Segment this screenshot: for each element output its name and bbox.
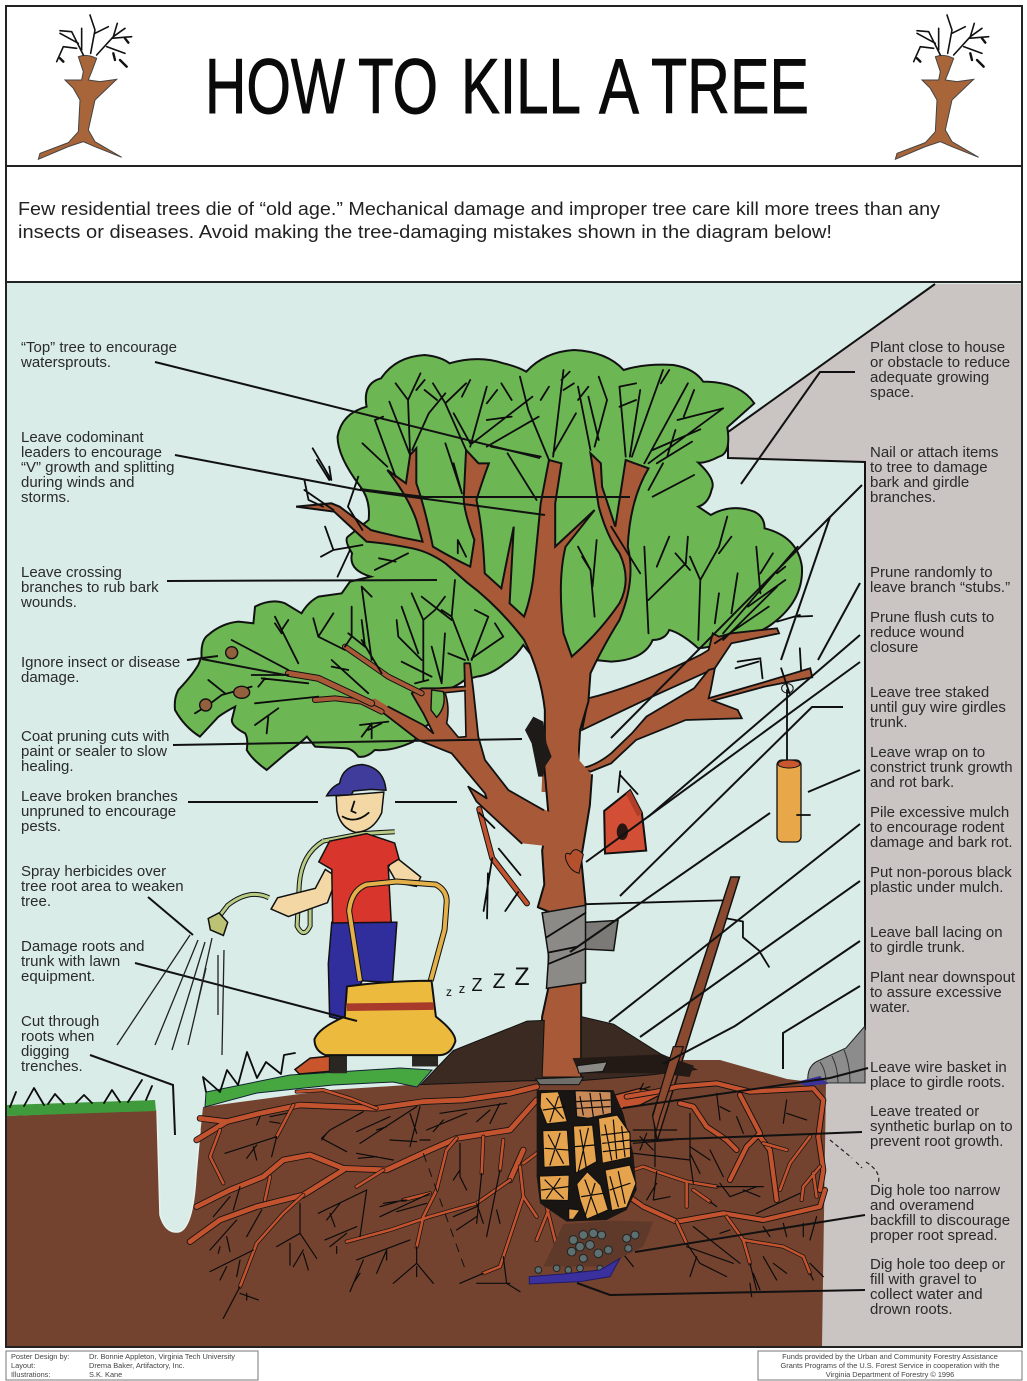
trench [157, 1110, 200, 1232]
label: herbicides: Spray herbicides over [21, 863, 166, 880]
label: burlap: synthetic burlap on to [870, 1118, 1013, 1135]
canopy twigs [304, 370, 798, 643]
right forks [582, 628, 779, 730]
hanging feeder [777, 690, 810, 842]
label: top tree: watersprouts. [20, 354, 111, 371]
label: plant close: adequate growing [870, 369, 989, 386]
label: insect damage: damage. [21, 669, 79, 686]
right callout lines [570, 372, 868, 1295]
person and mower [208, 765, 455, 1074]
lower-left twigs [195, 580, 503, 738]
label: staked: until guy wire girdles [870, 699, 1006, 716]
green lobe [431, 690, 444, 717]
label: flush cuts: closure [870, 639, 918, 656]
title: A [599, 42, 639, 130]
label: wire basket: Leave wire basket in [870, 1059, 1007, 1076]
footer: credits: Dr. Bonnie Appleton, Virginia Tech University [89, 1352, 235, 1361]
label: plant close: Plant close to house [870, 339, 1005, 356]
label: lawn equipment: trunk with lawn [21, 953, 120, 970]
label: nail items: to tree to damage [870, 459, 988, 476]
ball lacing [577, 1062, 607, 1073]
label: trenches: trenches. [21, 1058, 83, 1075]
label: plant close: or obstacle to reduce [870, 354, 1010, 371]
footer: funding: Grants Programs of the U.S. Forest Service in cooperation with the [781, 1361, 999, 1370]
label: broken branches: pests. [21, 818, 61, 835]
footer: credits: Poster Design by: [11, 1352, 69, 1361]
trunk base [538, 741, 592, 1079]
left labels [20, 339, 184, 1075]
diagram frame [6, 282, 1022, 1347]
label: staked: Leave tree staked [870, 684, 989, 701]
label: burlap: prevent root growth. [870, 1133, 1003, 1150]
label: plastic: Put non-porous black [870, 864, 1012, 881]
boot [295, 1056, 330, 1074]
trunk wrap [542, 905, 618, 988]
label: burlap: Leave treated or [870, 1103, 979, 1120]
label: nail items: bark and girdle [870, 474, 969, 491]
label: ball lacing: to girdle trunk. [870, 939, 965, 956]
label: deep hole: Dig hole too deep or [870, 1256, 1005, 1273]
cap [327, 765, 386, 796]
bark wound [565, 850, 583, 873]
soil cross-section [6, 1060, 826, 1347]
label: wrap: Leave wrap on to [870, 744, 985, 761]
birdhouse [604, 771, 646, 854]
label: pruning cuts: healing. [21, 758, 74, 775]
footer: credits: S.K. Kane [89, 1370, 122, 1379]
label: lawn equipment: Damage roots and [21, 938, 144, 955]
dashed arrow to root [830, 1140, 879, 1184]
spotted branches [288, 647, 422, 712]
insect galls [200, 647, 250, 711]
label: crossing branches: wounds. [20, 594, 77, 611]
label: downspout: Plant near downspout [870, 969, 1015, 986]
label: insect damage: Ignore insect or disease [21, 654, 180, 671]
label: nail items: branches. [870, 489, 936, 506]
footer: credits [6, 1351, 258, 1380]
label: codominant leaders: “V” growth and splitting [21, 459, 174, 476]
label: pruning cuts: paint or sealer to slow [21, 743, 167, 760]
label: codominant leaders: leaders to encourage [21, 444, 162, 461]
house wall [728, 284, 1022, 1347]
sleeping z text [446, 963, 530, 999]
footer: funding: Virginia Department of Forestry © 1996 [826, 1370, 954, 1379]
sleeping z text: Z [514, 963, 530, 991]
spray lines [117, 935, 224, 1055]
footer: credits: Layout: [11, 1361, 35, 1370]
label: crossing branches: Leave crossing [21, 564, 122, 581]
label: downspout: water. [869, 999, 910, 1016]
label: wrap: constrict trunk growth [870, 759, 1013, 776]
sleeping z text: z [459, 981, 465, 996]
sleeping z text: z [446, 985, 452, 999]
broken branch [479, 809, 527, 919]
wound cavity [525, 717, 552, 777]
mulch [421, 1017, 696, 1085]
title [205, 42, 809, 130]
footer: funding: Funds provided by the Urban and Community Forestry Assistance [782, 1352, 998, 1361]
footer: credits: Illustrations: [11, 1370, 50, 1379]
footer: credits: Drema Baker, Artifactory, Inc. [89, 1361, 185, 1370]
label: prune randomly: Prune randomly to [870, 564, 993, 581]
label: flush cuts: Prune flush cuts to [870, 609, 994, 626]
stake tip over roots [653, 1047, 683, 1132]
nozzle [208, 913, 228, 935]
right labels [869, 339, 1016, 1318]
label: flush cuts: reduce wound [870, 624, 964, 641]
gravel [535, 1221, 653, 1273]
mower handle [349, 882, 447, 981]
label: plant close: space. [870, 384, 914, 401]
label: pruning cuts: Coat pruning cuts with [21, 728, 169, 745]
sleeping z text: Z [472, 975, 482, 995]
lower trunk and mower scene [421, 771, 769, 1141]
sky hole [445, 691, 466, 737]
label: broken branches: Leave broken branches [21, 788, 178, 805]
standing water [529, 1258, 620, 1284]
label: trenches: roots when [21, 1028, 94, 1045]
title: HOW [205, 42, 345, 130]
black plastic under mulch [572, 1054, 694, 1077]
label: deep hole: collect water and [870, 1286, 983, 1303]
pants [328, 922, 397, 1020]
label: narrow hole: backfill to discourage [870, 1212, 1010, 1229]
label: top tree: “Top” tree to encourage [21, 339, 177, 356]
label: plastic: plastic under mulch. [870, 879, 1003, 896]
icon: right bare tree [895, 15, 989, 159]
grass: left of trench [6, 1080, 156, 1116]
tree [175, 350, 812, 1141]
label: narrow hole: proper root spread. [870, 1227, 998, 1244]
wheels [330, 1052, 347, 1073]
panel: intro text: Few residential trees die of “old age.” Mechanical damage and improper tree care kill more trees than any [18, 198, 941, 219]
grass: under mower [203, 1052, 432, 1107]
root system: right half and root ball [529, 1047, 825, 1297]
label: codominant leaders: storms. [21, 489, 70, 506]
label: deep hole: fill with gravel to [870, 1271, 977, 1288]
shirt [319, 834, 399, 923]
label: crossing branches: branches to rub bark [21, 579, 159, 596]
panel: intro text: insects or diseases. Avoid making the tree-damaging mistakes shown in the diagram below! [18, 221, 832, 242]
root system: left half [190, 1087, 537, 1318]
label: staked: trunk. [870, 714, 908, 731]
label: narrow hole: Dig hole too narrow [870, 1182, 1000, 1199]
label: deep hole: drown roots. [870, 1301, 953, 1318]
downspout [796, 1026, 865, 1086]
mower body [314, 981, 455, 1055]
lower-left limb [195, 580, 552, 847]
main trunk and forks [296, 448, 648, 792]
tree canopy and upper branches [175, 350, 812, 792]
label: lawn equipment: equipment. [21, 968, 95, 985]
title: TO [358, 42, 438, 130]
label: narrow hole: and overamend [870, 1197, 974, 1214]
right arm [388, 856, 421, 886]
label: downspout: to assure excessive [870, 984, 1002, 1001]
label: herbicides: tree root area to weaken [21, 878, 184, 895]
label: herbicides: tree. [21, 893, 51, 910]
label: prune randomly: leave branch “stubs.” [870, 579, 1010, 596]
label: mulch: Pile excessive mulch [870, 804, 1009, 821]
panel: header [6, 6, 1022, 166]
label: mulch: to encourage rodent [870, 819, 1005, 836]
sleeping z text: Z [493, 970, 506, 993]
left arm [271, 869, 337, 917]
label: broken branches: unpruned to encourage [21, 803, 176, 820]
label: wrap: and rot bark. [870, 774, 954, 791]
title: TREE [651, 42, 809, 130]
label: trenches: digging [21, 1043, 69, 1060]
left callout lines [90, 362, 630, 1135]
head [336, 792, 384, 832]
label: trenches: Cut through [21, 1013, 99, 1030]
stubs and knots [736, 615, 812, 693]
hose [219, 832, 395, 933]
label: ball lacing: Leave ball lacing on [870, 924, 1003, 941]
label: codominant leaders: Leave codominant [21, 429, 144, 446]
label: wire basket: place to girdle roots. [870, 1074, 1005, 1091]
label: mulch: damage and bark rot. [870, 834, 1013, 851]
root ball in burlap [537, 1090, 637, 1222]
label: nail items: Nail or attach items [870, 444, 998, 461]
title: KILL [461, 42, 581, 130]
icon: left bare tree [38, 15, 132, 159]
footer: funding [758, 1351, 1022, 1380]
guy wire [586, 900, 769, 967]
panel: diagram background [6, 282, 1022, 1347]
stake [653, 877, 739, 1141]
label: codominant leaders: during winds and [21, 474, 134, 491]
panel: intro text [6, 166, 1022, 282]
